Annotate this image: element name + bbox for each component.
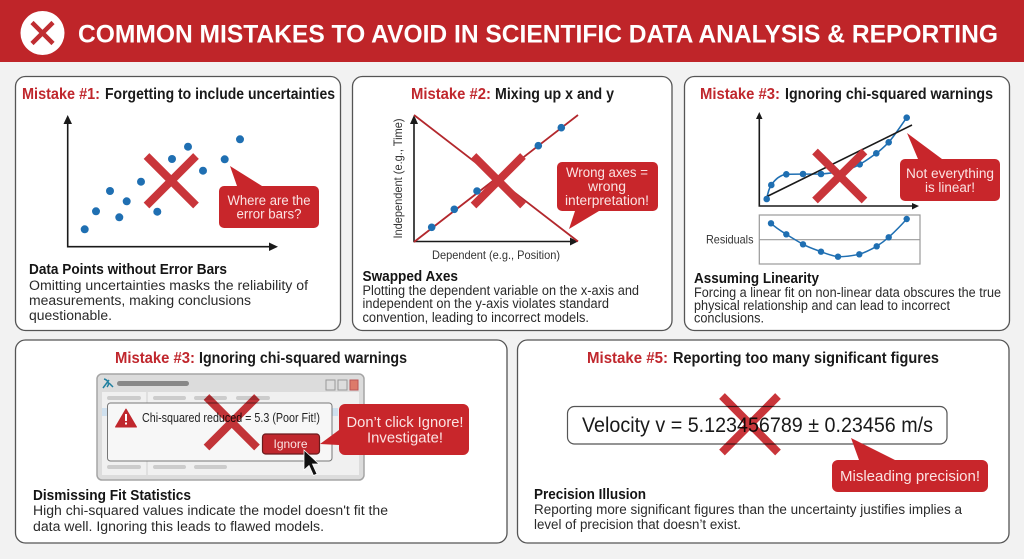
- callout: not everything is linear: is linear!: [925, 180, 975, 195]
- panel: mistake 2: [352, 76, 672, 330]
- heading: mistake 1: Forgetting to include uncertainties: [105, 86, 335, 103]
- text block: data points without error bars: Omitting uncertainties masks the reliability of: [29, 278, 308, 293]
- panel: mistake 1: [16, 76, 340, 330]
- icon: red X in white circle: [20, 11, 64, 55]
- chart: linear fit on non-linear data: [756, 112, 919, 210]
- velocity equation box: Velocity v = 5.123456789 ± 0.23456 m/s: [582, 414, 933, 437]
- callout: misleading precision: [832, 438, 988, 492]
- callout: where are the error bars: error bars?: [236, 206, 302, 222]
- callout: don't click ignore: [320, 404, 469, 455]
- heading: mistake 2: Mistake #2:: [411, 86, 491, 103]
- callout: don't click ignore: Investigate!: [367, 430, 443, 446]
- text block: precision illusion: Precision Illusion: [534, 486, 646, 503]
- ignore button: [262, 434, 320, 454]
- software window illustration: [97, 374, 364, 480]
- callout: not everything is linear: [900, 133, 1000, 201]
- text block: assuming linearity: conclusions.: [694, 310, 764, 326]
- panel: mistake 3 linearity: [684, 76, 1010, 330]
- text block: swapped axes: independent on the y-axis violates standard: [362, 296, 609, 311]
- icon: app logo: [103, 379, 113, 388]
- heading: mistake 1: Mistake #1:: [22, 86, 100, 103]
- text block: assuming linearity: [694, 270, 1001, 326]
- text block: swapped axes: Plotting the dependent variable on the x-axis and: [362, 283, 639, 298]
- heading: ignoring chi-squared warnings: [700, 86, 993, 103]
- heading: mistake 1: [22, 86, 335, 103]
- chart: swapped axes: [391, 115, 578, 262]
- icon: mouse cursor: [304, 450, 319, 476]
- heading: ignoring chi-squared warnings: Mistake #3:: [700, 86, 780, 103]
- text block: data points without error bars: Data Points without Error Bars: [29, 261, 227, 278]
- header banner: [0, 0, 1024, 62]
- heading: ignoring chi-squared warnings: Ignoring chi-squared warnings: [785, 86, 993, 103]
- text block: precision illusion: level of precision that doesn’t exist.: [534, 517, 741, 532]
- text block: swapped axes: convention, leading to incorrect models.: [362, 310, 589, 325]
- text block: dismissing fit statistics: Dismissing Fit Statistics: [33, 487, 191, 504]
- y axis label: Independent (e.g., Time): [391, 118, 405, 238]
- callout: wrong axes: Wrong axes =: [566, 165, 648, 180]
- heading: mistake 5: Mistake #5:: [587, 350, 668, 367]
- icon: red X: [146, 156, 196, 206]
- callout: misleading precision: Misleading precision!: [840, 468, 980, 485]
- text block: swapped axes: Swapped Axes: [362, 268, 458, 285]
- icon: red X: [815, 152, 864, 200]
- panel: mistake 5: [518, 340, 1009, 543]
- callout: wrong axes: interpretation!: [565, 193, 649, 208]
- callout: where are the error bars: Where are the: [228, 193, 310, 208]
- text block: dismissing fit statistics: High chi-squared values indicate the model doesn't fit the: [33, 503, 388, 518]
- icon: red X: [722, 396, 778, 452]
- text block: data points without error bars: questionable.: [29, 308, 112, 323]
- callout: don't click ignore: Don’t click Ignore!: [346, 414, 464, 431]
- warning dialog: [108, 403, 332, 461]
- velocity equation box: [568, 406, 947, 444]
- residuals label: Residuals: [706, 232, 754, 246]
- heading: ignoring chi-squared warnings: Mistake #3:: [115, 350, 195, 367]
- panel: mistake 3 fit statistics: [16, 340, 507, 543]
- text block: data points without error bars: [29, 261, 308, 323]
- text block: data points without error bars: measurements, making conclusions: [29, 293, 251, 308]
- text block: assuming linearity: physical relationship and can lead to incorrect: [694, 298, 950, 313]
- text block: dismissing fit statistics: [33, 487, 388, 534]
- scatter chart without error bars: [64, 115, 278, 251]
- callout: wrong axes: [557, 162, 658, 229]
- callout: wrong axes: wrong: [587, 179, 626, 194]
- heading: ignoring chi-squared warnings: [115, 350, 407, 367]
- text block: assuming linearity: Assuming Linearity: [694, 270, 820, 287]
- x axis label: Dependent (e.g., Position): [432, 248, 560, 262]
- title: COMMON MISTAKES TO AVOID IN SCIENTIFIC DATA ANALYSIS & REPORTING: [78, 20, 998, 48]
- text block: dismissing fit statistics: data well. Ignoring this leads to flawed models.: [33, 519, 324, 534]
- heading: mistake 2: [411, 86, 614, 103]
- chart: residuals: [706, 215, 920, 264]
- text block: precision illusion: Reporting more significant figures than the uncertainty justifies implies a: [534, 502, 962, 517]
- text block: assuming linearity: Forcing a linear fit on non-linear data obscures the true: [694, 285, 1001, 300]
- text block: precision illusion: [534, 486, 962, 532]
- text block: swapped axes: [362, 268, 639, 325]
- heading: ignoring chi-squared warnings: Ignoring chi-squared warnings: [199, 350, 407, 367]
- icon: warning triangle: [116, 409, 136, 427]
- heading: mistake 5: Reporting too many significant figures: [673, 350, 939, 367]
- callout: where are the error bars: [219, 166, 319, 228]
- icon: red X: [206, 397, 257, 448]
- callout: not everything is linear: Not everything: [906, 166, 994, 181]
- heading: mistake 2: Mixing up x and y: [495, 86, 614, 103]
- chi-squared message: Chi-squared reduced = 5.3 (Poor Fit!): [142, 410, 320, 425]
- ignore button: Ignore: [273, 437, 308, 451]
- icon: red X: [474, 156, 523, 206]
